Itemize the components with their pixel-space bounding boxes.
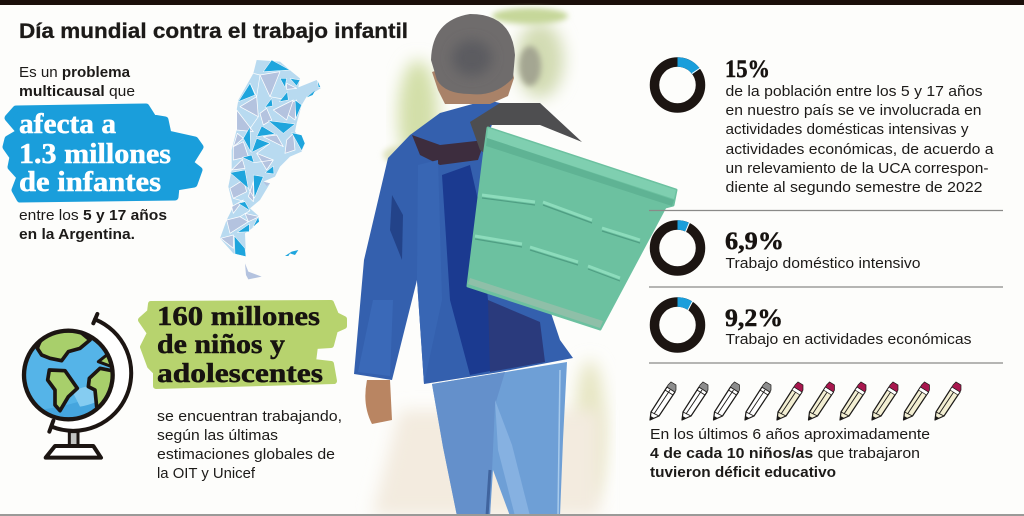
stat: 6,9%: [654, 222, 920, 272]
panel: 1.3 millones: [6, 64, 200, 243]
highlighted figure: adolescentes: [157, 357, 323, 388]
description 15%: diente al segundo semestre de 2022: [726, 179, 982, 196]
highlighted figure: 160 millones: [157, 300, 320, 331]
text: source: la OIT y Unicef: [157, 465, 256, 482]
panel: 160 millones: [141, 300, 344, 482]
figure 15%: 15%: [725, 56, 770, 83]
donut chart 6,9%: [654, 222, 700, 271]
description 9,2%: Trabajo en actividades económicas: [726, 331, 972, 348]
neck and ears: [432, 70, 514, 104]
text: educational deficit: 4 de cada 10 niños/as que trabajaron: [650, 445, 920, 462]
description 15%: un relevamiento de la UCA correspon-: [726, 160, 989, 177]
green bucket: [468, 128, 676, 329]
description 15%: actividades económicas, de acuerdo a: [726, 141, 994, 158]
highlighted figure: 1.3 millones: [19, 139, 171, 170]
text: intro: Es un problema: [19, 64, 131, 81]
photo: child carrying a green bucket: [354, 8, 676, 516]
description 15%: en nuestro país se ve involucrada en: [726, 102, 982, 119]
hoodie: [354, 100, 573, 384]
donut chart 9,2%: [654, 300, 700, 348]
description 15%: actividades domésticas intensivas y: [726, 121, 969, 138]
donut chart 15%: [654, 62, 701, 108]
text: intro: multicausal que: [19, 83, 135, 100]
stat: 15%: [654, 56, 994, 196]
top black bar: [0, 0, 1024, 5]
text: source: se encuentran trabajando,: [157, 408, 342, 425]
text: source: según las últimas: [157, 427, 278, 444]
strap: [470, 103, 582, 155]
text: age range: entre los 5 y 17 años: [19, 207, 167, 224]
blue brush highlight: [6, 107, 200, 199]
figure 6,9%: 6,9%: [725, 228, 784, 255]
green brush highlight: [141, 303, 344, 386]
map of Argentina: [220, 60, 321, 279]
hand: [365, 380, 392, 424]
icon: desk globe: [23, 314, 131, 458]
text: educational deficit: En los últimos 6 años aproximadamente: [650, 426, 930, 443]
photo background: foliage and path: [372, 8, 606, 516]
text: source: estimaciones globales de: [157, 446, 335, 463]
description 15%: [726, 83, 994, 196]
stat: 9,2%: [654, 300, 972, 348]
jeans: [432, 362, 567, 516]
highlighted figure: de niños y: [157, 328, 285, 359]
text: age range: en la Argentina.: [19, 226, 135, 243]
text: age range: [19, 207, 167, 243]
text: source: [157, 408, 342, 482]
pencil row: 4 of 10: [650, 382, 961, 420]
highlighted figure: [19, 109, 171, 198]
text: intro: [19, 64, 135, 100]
figure 9,2%: 9,2%: [725, 305, 783, 332]
description 15%: de la población entre los 5 y 17 años: [726, 83, 982, 100]
text: educational deficit: tuvieron déficit educativo: [650, 464, 836, 481]
head: [431, 14, 515, 94]
highlighted figure: afecta a: [19, 109, 116, 140]
highlighted figure: [157, 300, 323, 388]
text: educational deficit: [650, 426, 930, 481]
description 6,9%: Trabajo doméstico intensivo: [726, 255, 920, 272]
title: Día mundial contra el trabajo infantil: [19, 20, 408, 43]
highlighted figure: de infantes: [19, 167, 161, 198]
